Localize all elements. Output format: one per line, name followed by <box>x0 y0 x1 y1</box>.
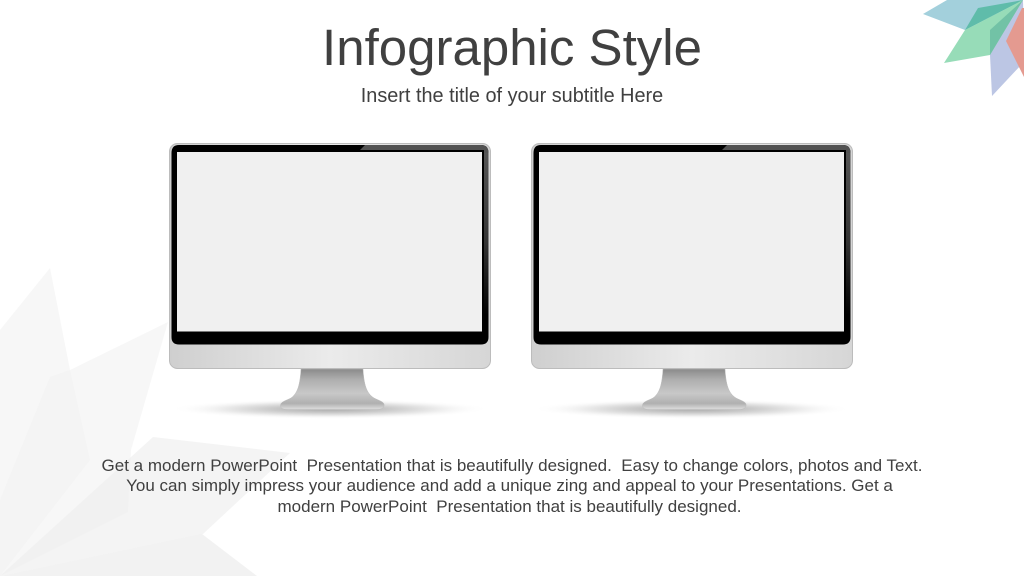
screen <box>539 152 844 332</box>
bezel <box>534 145 850 344</box>
bezel highlight right <box>846 153 850 333</box>
body <box>532 144 852 368</box>
body text: modern PowerPoint Presentation that is beautifully designed. <box>278 496 742 516</box>
subtitle: Insert the title of your subtitle Here <box>361 85 663 107</box>
bezel highlight top <box>360 145 488 153</box>
stand <box>642 369 746 410</box>
shadow <box>170 399 490 419</box>
shadow <box>532 399 852 419</box>
monitor left <box>169 143 491 417</box>
background: grey polygon shapes <box>0 370 290 576</box>
stand <box>280 369 384 410</box>
bezel highlight right <box>484 153 488 333</box>
bezel <box>172 145 488 344</box>
screen <box>177 152 482 332</box>
body <box>170 144 490 368</box>
decoration: coloured corner polygons <box>923 0 1024 96</box>
body text: You can simply impress your audience and add a unique zing and appeal to your Presentations. Get a <box>126 476 893 495</box>
monitor right <box>531 143 853 417</box>
body text <box>102 456 922 516</box>
title: Infographic Style <box>322 19 702 76</box>
bezel highlight top <box>722 145 850 153</box>
body text: Get a modern PowerPoint Presentation that is beautifully designed. Easy to change colors, photos and Text. <box>102 456 922 474</box>
